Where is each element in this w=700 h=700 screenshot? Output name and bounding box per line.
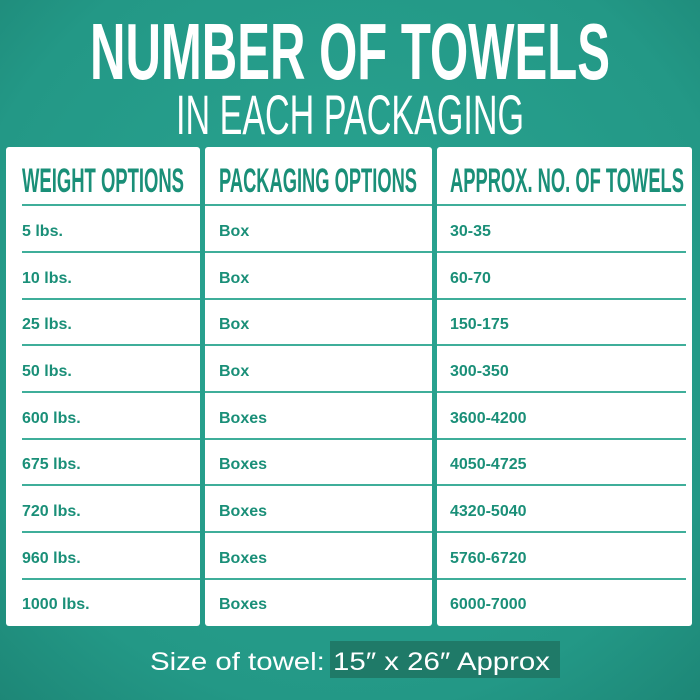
panel: approx number of towels: 60-70: [450, 270, 491, 287]
panel: approx number of towels: 150-175: [450, 316, 509, 333]
panel: weight options: 25 lbs.: [22, 316, 72, 333]
panel: weight options: 960 lbs.: [22, 550, 81, 567]
panel: weight options: 720 lbs.: [22, 503, 81, 520]
panel: weight options: 675 lbs.: [22, 456, 81, 473]
panel: packaging options: Box: [219, 270, 249, 287]
panel: packaging options: Box: [219, 363, 249, 380]
panel: approx number of towels: 4050-4725: [450, 456, 527, 473]
panel: packaging options: Boxes: [219, 456, 267, 473]
panel: approx number of towels: 30-35: [450, 223, 491, 240]
panel: weight options: 5 lbs.: [22, 223, 63, 240]
panel: approx number of towels: 5760-6720: [450, 550, 527, 567]
panel: packaging options: Boxes: [219, 550, 267, 567]
panel: weight options: 1000 lbs.: [22, 596, 90, 613]
panel: weight options: 50 lbs.: [22, 363, 72, 380]
heading: weight options: WEIGHT OPTIONS: [22, 162, 184, 200]
panel: weight options: [6, 147, 200, 626]
panel: packaging options: [205, 147, 432, 626]
panel: packaging options: Boxes: [219, 410, 267, 427]
panel: weight options: 10 lbs.: [22, 270, 72, 287]
panel: packaging options: Boxes: [219, 503, 267, 520]
panel: approx number of towels: 3600-4200: [450, 410, 527, 427]
panel: weight options: 600 lbs.: [22, 410, 81, 427]
panel: approx number of towels: [437, 147, 692, 626]
panel: approx number of towels: 6000-7000: [450, 596, 527, 613]
panel: packaging options: Box: [219, 316, 249, 333]
title: [90, 7, 610, 146]
footer: towel size: Size of towel: 15″ x 26″ Approx: [150, 648, 551, 676]
panel: packaging options: Boxes: [219, 596, 267, 613]
footer: towel size: [150, 641, 560, 678]
heading: packaging options: PACKAGING OPTIONS: [219, 162, 417, 200]
panel: approx number of towels: 300-350: [450, 363, 509, 380]
panel: packaging options: Box: [219, 223, 249, 240]
panel: approx number of towels: 4320-5040: [450, 503, 527, 520]
